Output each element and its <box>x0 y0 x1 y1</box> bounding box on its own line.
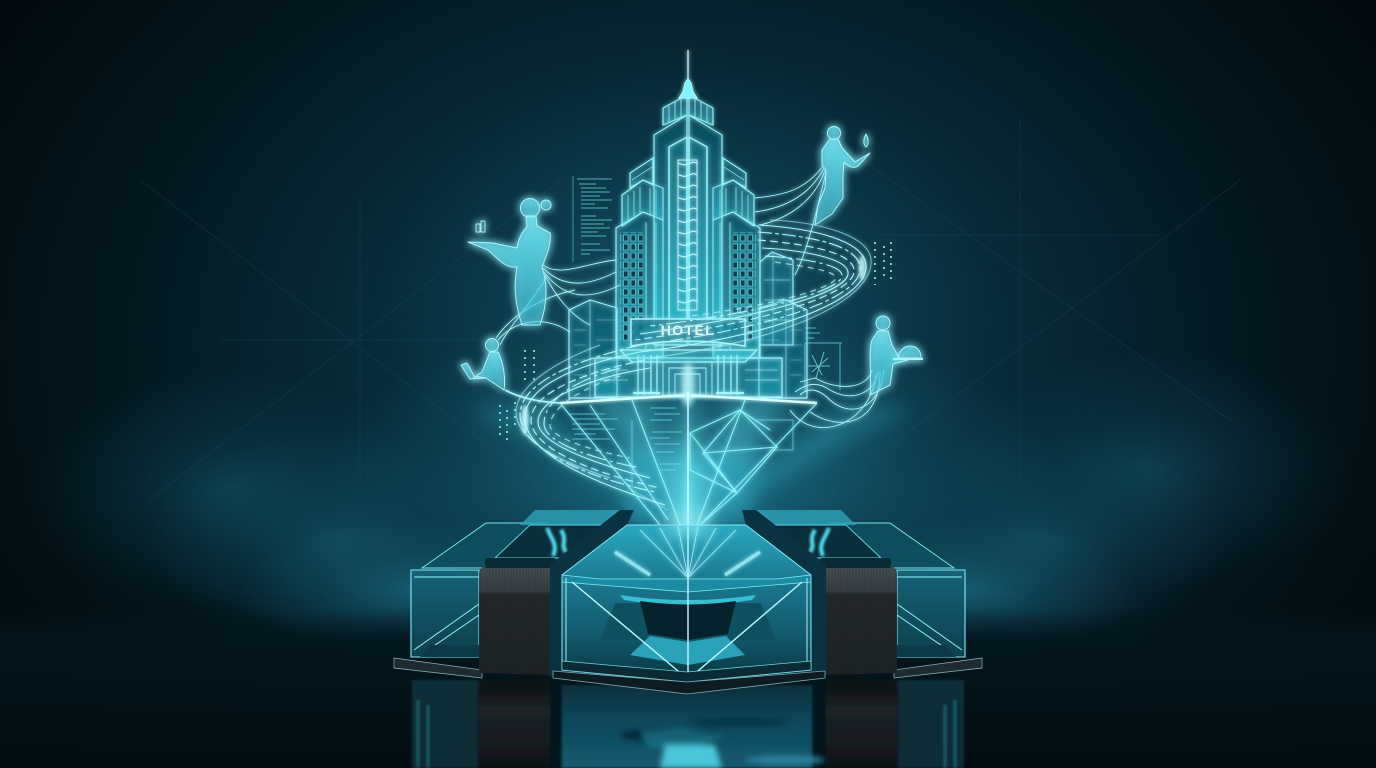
panel: lower left text <box>570 414 618 439</box>
panel: upper left code <box>573 176 612 262</box>
central window ladder <box>678 160 697 310</box>
icon: flame <box>864 134 868 147</box>
entrance glow <box>681 363 695 407</box>
strands: seated figure <box>496 290 575 403</box>
panel: right schematic <box>805 328 842 392</box>
top setback <box>630 158 653 188</box>
left half of tower <box>569 95 687 398</box>
spire <box>687 50 689 84</box>
left lower band <box>516 345 665 505</box>
fog <box>30 60 1350 660</box>
icon: bar chart <box>476 221 485 232</box>
panel: stray data right <box>875 242 891 285</box>
base lower frame <box>562 661 811 682</box>
upper right band <box>635 220 871 358</box>
floor <box>0 610 1376 768</box>
right side glass assembly (mirror) <box>756 510 982 678</box>
panel: stray data left <box>500 350 534 445</box>
podium <box>595 350 782 397</box>
hotel sign <box>631 319 745 346</box>
shoulder <box>654 115 687 345</box>
central beam <box>673 392 703 530</box>
central glass <box>562 525 811 682</box>
upper side block <box>622 180 663 226</box>
left metal column <box>479 567 550 675</box>
figure strands <box>496 166 884 428</box>
crown <box>663 95 687 125</box>
code panels <box>500 176 891 470</box>
figure: woman with tablet <box>468 198 551 325</box>
holographic cone <box>560 395 817 525</box>
figure: top right attendant <box>815 126 870 225</box>
far right block <box>760 252 793 345</box>
projector base <box>394 510 982 694</box>
left side glass assembly <box>394 510 620 678</box>
shelf <box>562 575 811 592</box>
figure: seated with laptop <box>461 338 505 390</box>
strands: top right figure <box>755 166 826 275</box>
dark core <box>600 603 776 640</box>
icon: cloche <box>898 346 921 358</box>
low block <box>569 300 617 398</box>
light beams <box>470 395 910 530</box>
building <box>569 50 807 398</box>
strands: butler <box>790 370 884 428</box>
inner rays <box>615 526 760 578</box>
faint grid lines <box>140 120 1240 500</box>
dark frame <box>550 510 826 693</box>
front braces <box>566 526 807 682</box>
data swirl <box>516 220 871 505</box>
beam hot spot <box>666 517 710 533</box>
right half of tower (mirror) <box>689 95 807 398</box>
panel: lower centre text <box>650 408 682 470</box>
strands: woman <box>500 260 620 345</box>
hotel sign: HOTEL <box>661 322 715 338</box>
floor reflection <box>412 680 964 768</box>
figure: butler with cloche <box>870 316 923 395</box>
mid-low side <box>616 212 663 358</box>
